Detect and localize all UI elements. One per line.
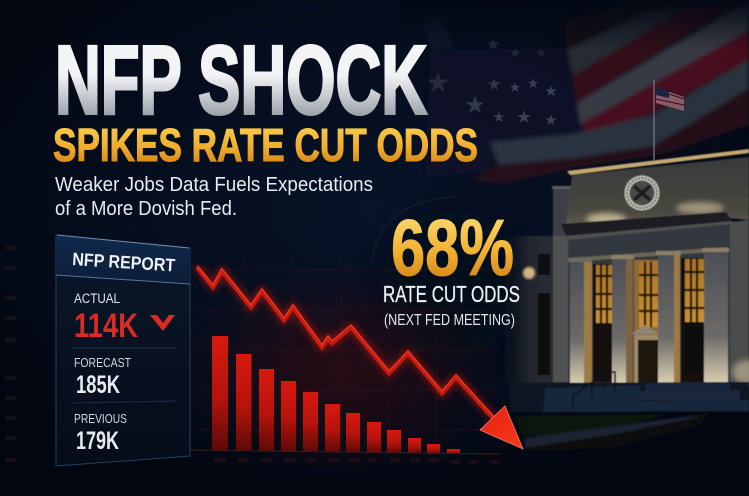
columns xyxy=(568,248,729,383)
odds note: (NEXT FED MEETING) xyxy=(384,312,515,329)
Federal Reserve building xyxy=(495,149,749,412)
previous label: PREVIOUS xyxy=(74,411,127,426)
bar chart xyxy=(212,336,460,454)
panel header xyxy=(56,235,190,284)
falling trend line with arrow xyxy=(197,266,523,449)
subtitle in gold: SPIKES RATE CUT ODDS xyxy=(53,119,478,171)
left wing xyxy=(495,186,575,386)
flag stars: ★ xyxy=(492,109,506,126)
flag stars: ★ xyxy=(516,107,532,127)
callout: 68% odds xyxy=(383,203,520,329)
flag stars: ★ xyxy=(464,92,486,119)
chart glow xyxy=(175,265,505,475)
flag stars: ★ xyxy=(485,35,501,54)
y-axis ghost ticks xyxy=(5,246,17,462)
odds figure: 68% xyxy=(391,203,514,292)
steps xyxy=(510,382,749,412)
flag stars: ★ xyxy=(536,46,546,60)
ground xyxy=(515,412,710,451)
chart grid xyxy=(195,255,500,450)
flag stars: ★ xyxy=(486,75,502,94)
attic storey xyxy=(565,157,749,232)
flag stars xyxy=(425,35,558,129)
roof highlight xyxy=(567,149,749,175)
flag stars: ★ xyxy=(544,83,558,100)
flag stars: ★ xyxy=(425,67,451,98)
windows xyxy=(593,258,704,382)
flag stars: ★ xyxy=(527,75,539,91)
flag stars: ★ xyxy=(509,45,521,60)
odds label: RATE CUT ODDS xyxy=(383,281,520,307)
top fade over flag xyxy=(400,0,749,50)
panel title: NFP REPORT xyxy=(72,249,176,275)
description xyxy=(55,174,373,220)
previous value: 179K xyxy=(76,427,119,455)
dark halo behind odds xyxy=(380,210,520,360)
seal xyxy=(624,176,660,210)
cornice xyxy=(561,212,732,236)
actual label: ACTUAL xyxy=(74,291,120,306)
American flag backdrop xyxy=(422,0,749,184)
flag stars: ★ xyxy=(544,112,558,129)
entablature trim xyxy=(568,247,728,262)
description: Weaker Jobs Data Fuels Expectations xyxy=(55,174,373,196)
entrance xyxy=(631,325,659,383)
main wall xyxy=(568,222,730,385)
NFP report panel xyxy=(56,235,190,466)
icon: down chevron xyxy=(150,315,175,331)
flag stars: ★ xyxy=(509,79,521,95)
actual value: 114K xyxy=(74,307,138,345)
forecast label: FORECAST xyxy=(74,355,131,370)
forecast value: 185K xyxy=(76,371,120,399)
title: NFP SHOCK xyxy=(55,26,427,134)
chart baseline and month ghosts xyxy=(190,450,500,464)
flagpole and small flag xyxy=(654,80,684,160)
description: of a More Dovish Fed. xyxy=(55,198,237,220)
stair railing xyxy=(573,372,615,410)
